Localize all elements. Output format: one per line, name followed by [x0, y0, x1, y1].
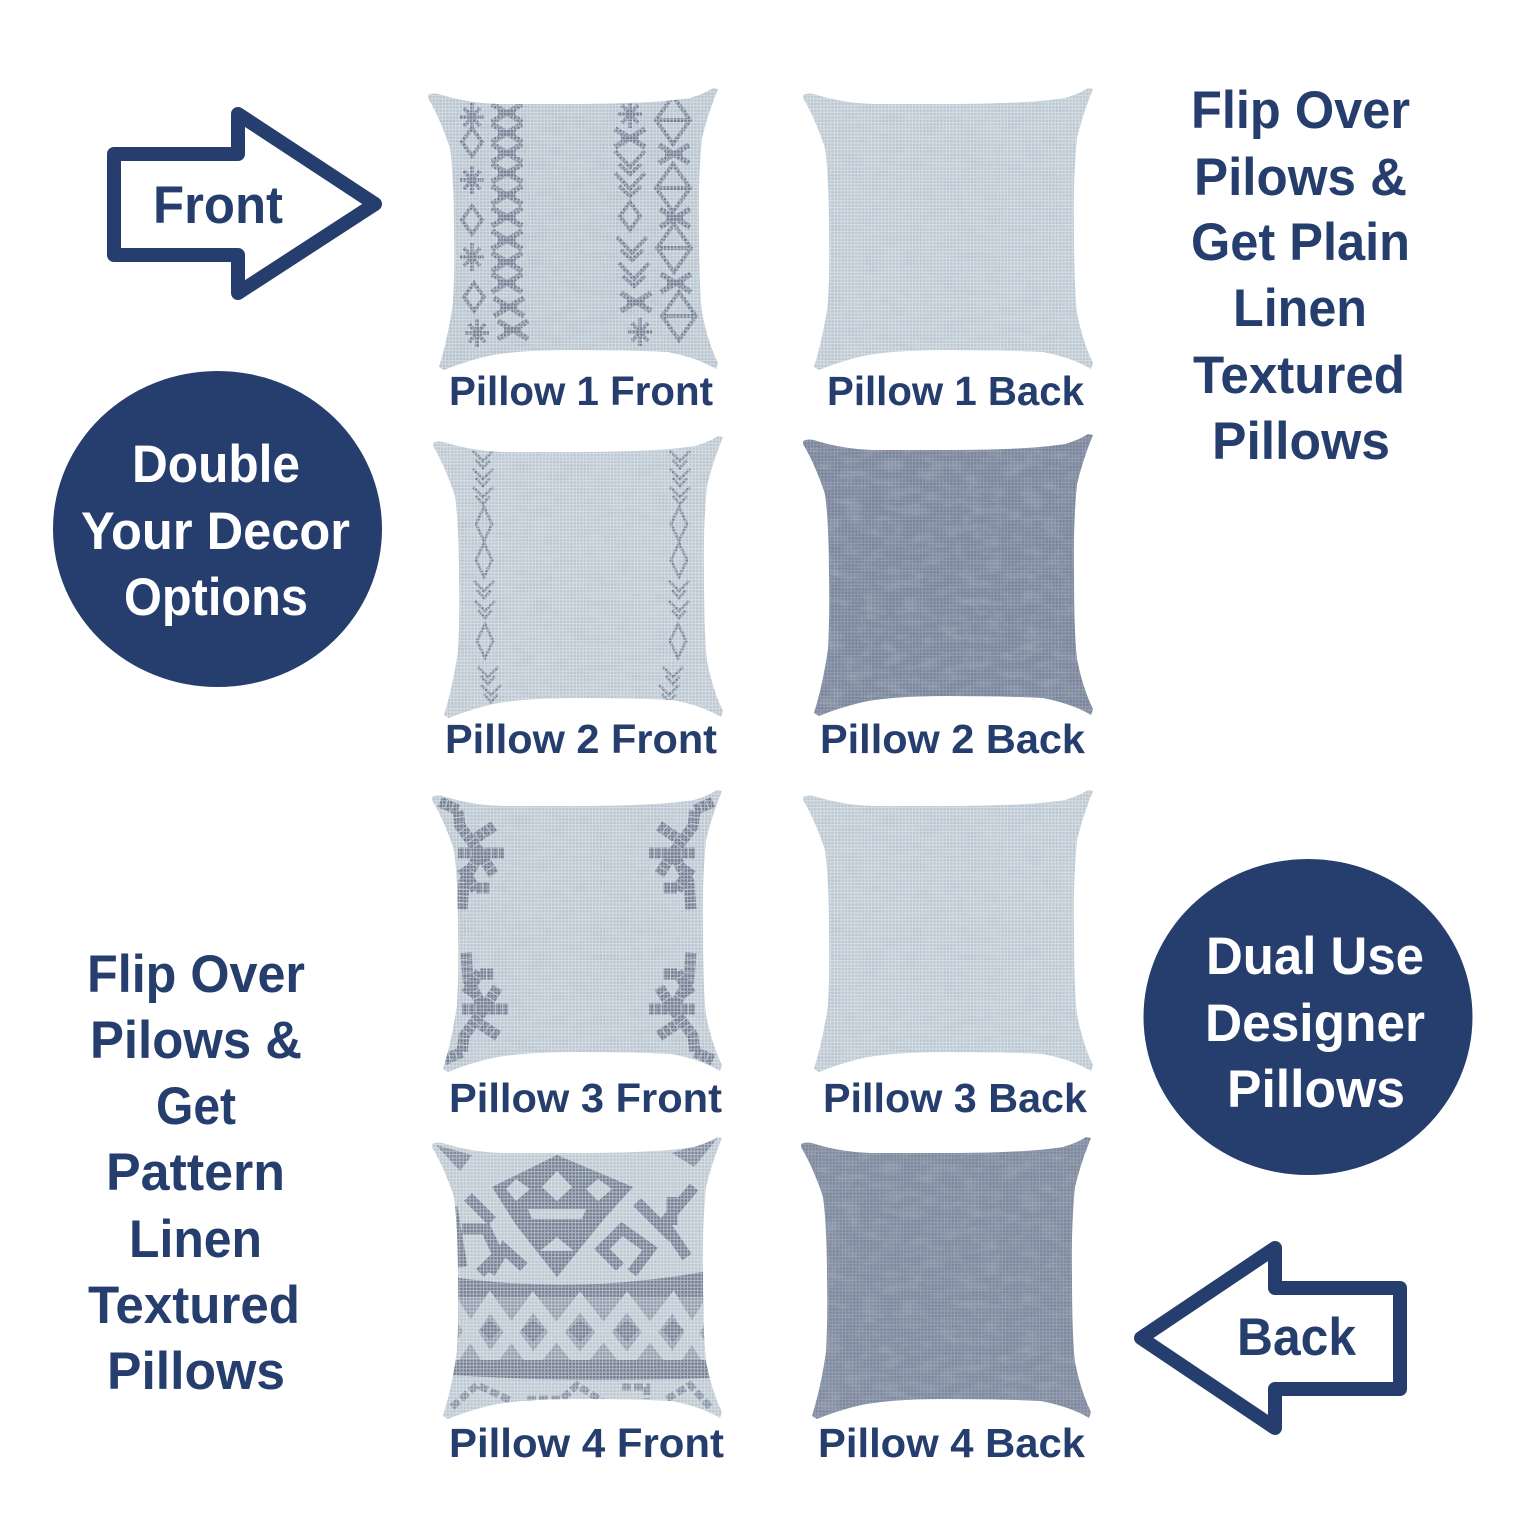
text block: flip over pilows and get pattern linen textured pillows: Linen: [129, 1210, 262, 1269]
text block: flip over pillows and get plain linen textured pillows: Linen: [1233, 279, 1367, 338]
text block: flip over pillows and get plain linen textured pillows: [1191, 81, 1410, 471]
pillow 4 back: [801, 1137, 1091, 1419]
text block: flip over pillows and get plain linen textured pillows: Pillows: [1212, 412, 1390, 471]
callout circle: double your decor options: Your Decor: [81, 502, 350, 561]
text block: flip over pilows and get pattern linen textured pillows: Flip Over: [87, 945, 305, 1004]
label: pillow 4 front: Pillow 4 Front: [449, 1420, 724, 1466]
text block: flip over pilows and get pattern linen textured pillows: [87, 945, 305, 1401]
arrow: front: Front: [153, 176, 283, 235]
pillow 3 back: [803, 790, 1093, 1072]
pillow 2 back: [803, 434, 1093, 716]
label: pillow 3 front: Pillow 3 Front: [449, 1075, 722, 1121]
pattern: thin side columns: [473, 451, 690, 702]
text block: flip over pilows and get pattern linen textured pillows: Textured: [88, 1276, 300, 1335]
pillow 2 front: [433, 436, 723, 718]
pattern: kilim motif: [436, 1139, 717, 1407]
pillow 1 front: [428, 88, 718, 370]
label: pillow 2 front: Pillow 2 Front: [445, 716, 717, 762]
text block: flip over pillows and get plain linen textured pillows: Pilows &: [1194, 148, 1407, 207]
arrow: back: Back: [1237, 1308, 1356, 1367]
text block: flip over pilows and get pattern linen textured pillows: Pattern: [106, 1143, 285, 1202]
pattern: corner motifs: [440, 802, 713, 1060]
text block: flip over pillows and get plain linen textured pillows: Get Plain: [1191, 213, 1410, 272]
label: pillow 2 back: Pillow 2 Back: [820, 716, 1085, 762]
arrow: front: [114, 114, 375, 293]
arrow: back: [1141, 1248, 1400, 1428]
pillow 4 front: [432, 1137, 722, 1419]
text block: flip over pilows and get pattern linen textured pillows: Pillows: [107, 1342, 285, 1401]
callout circle: double your decor options: Options: [124, 568, 308, 627]
label: pillow 3 back: Pillow 3 Back: [823, 1075, 1087, 1121]
callout circle: dual use designer pillows: Designer: [1205, 994, 1425, 1053]
text block: flip over pilows and get pattern linen textured pillows: Get: [156, 1077, 236, 1136]
text block: flip over pillows and get plain linen textured pillows: Textured: [1193, 346, 1405, 405]
text block: flip over pillows and get plain linen textured pillows: Flip Over: [1191, 81, 1410, 140]
callout circle: double your decor options: Double: [132, 435, 300, 494]
pattern: stitched columns: [460, 96, 696, 347]
callout circle: dual use designer pillows: Dual Use: [1206, 927, 1424, 986]
callout circle: dual use designer pillows: Pillows: [1227, 1060, 1405, 1119]
pillow 3 front: [432, 790, 722, 1072]
label: pillow 1 front: Pillow 1 Front: [449, 368, 713, 414]
callout circle: double your decor options: [53, 371, 382, 687]
label: pillow 4 back: Pillow 4 Back: [818, 1420, 1085, 1466]
text block: flip over pilows and get pattern linen textured pillows: Pilows &: [90, 1011, 302, 1070]
pillow 1 back: [803, 88, 1093, 370]
label: pillow 1 back: Pillow 1 Back: [827, 368, 1084, 414]
callout circle: dual use designer pillows: [1144, 859, 1472, 1175]
